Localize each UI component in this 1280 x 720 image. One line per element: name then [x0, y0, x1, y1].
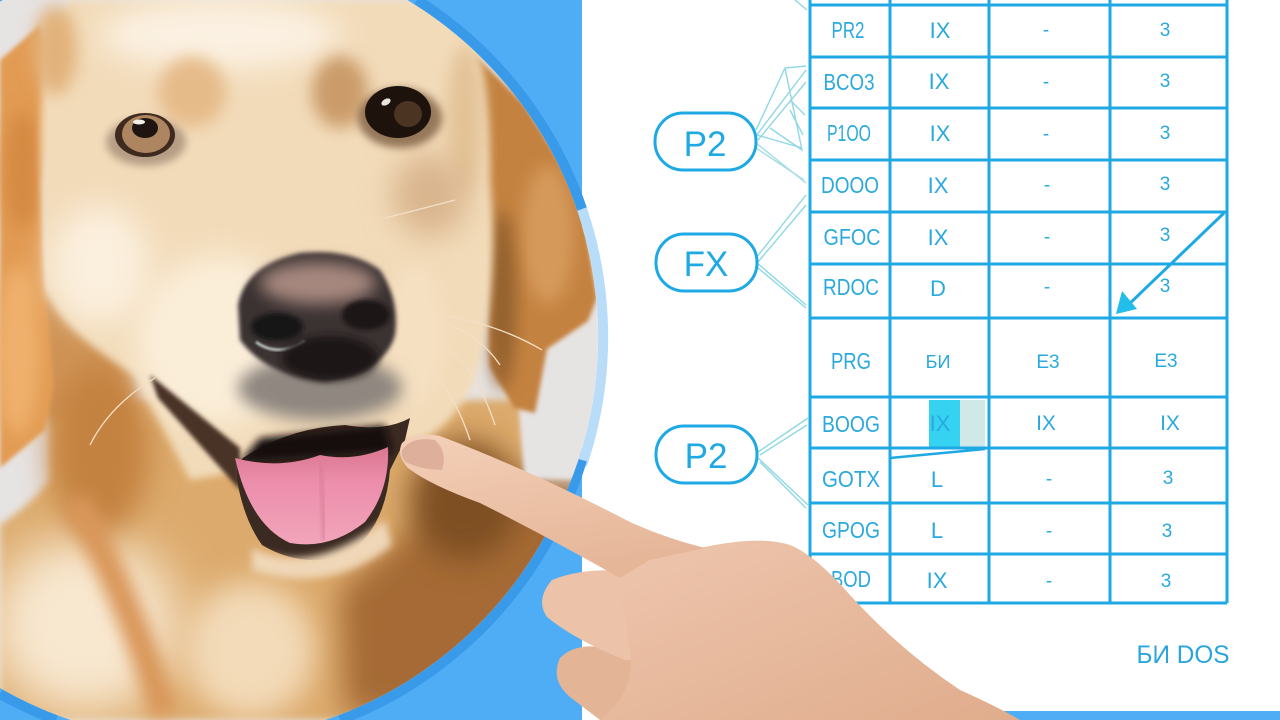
background panel: blue left [0, 0, 582, 720]
left ear dark top [4, 110, 40, 230]
arrow [1116, 213, 1224, 314]
right top tan [447, 45, 483, 195]
pill: P2 lower [656, 426, 757, 483]
column 2 values: IX [927, 568, 948, 593]
nose [238, 252, 396, 382]
fingernail [402, 439, 444, 470]
column 1 labels: GFOC [824, 224, 880, 250]
column 3 values: - [1044, 277, 1050, 298]
panel: white table area [655, 0, 1230, 669]
column 3 values: - [1044, 227, 1050, 248]
column 4 values: 3 [1160, 123, 1170, 144]
column 3 values [1036, 20, 1060, 592]
pill: FX [656, 234, 757, 291]
column 1 labels: P1OO [827, 120, 871, 146]
column 4 values [1154, 20, 1180, 592]
column 2 values: L [931, 467, 943, 492]
dog head [41, 0, 493, 480]
whiskers [90, 200, 542, 445]
right cheek tint [392, 153, 468, 237]
column 4 values: E3 [1154, 351, 1178, 372]
column 3 values: - [1046, 521, 1052, 542]
column 1 labels: RDOC [823, 274, 879, 300]
muzzle [135, 255, 305, 425]
column 1 labels: BOOG [822, 411, 880, 437]
cheek cream left [50, 205, 150, 325]
column 4 values: 3 [1160, 276, 1170, 297]
column 4 values: 3 [1160, 225, 1170, 246]
column 2 values: IX [929, 69, 950, 94]
column 3 values: - [1046, 469, 1052, 490]
column 4 values: 3 [1160, 20, 1170, 41]
darker ring upper right [417, 0, 582, 209]
hand back [600, 541, 1020, 720]
table text [821, 17, 1180, 593]
connectors from pills to table [756, 0, 808, 508]
column 3 values: - [1046, 571, 1052, 592]
column 2 values: БИ [926, 352, 950, 372]
column 3 values: E3 [1036, 352, 1060, 373]
index finger [400, 435, 705, 578]
mouth [150, 375, 410, 560]
lower finger [557, 646, 700, 720]
column 3 values: - [1043, 72, 1049, 93]
background strip: blue bottom right [1000, 711, 1280, 720]
light ring on white panel [582, 209, 603, 465]
right eye [358, 86, 442, 148]
caption: БИ DOS [1136, 641, 1230, 669]
highlighted cell [929, 400, 985, 447]
darker ring lower right [340, 460, 582, 720]
column 4 values: IX [1160, 412, 1180, 435]
column 1 labels: GPOG [822, 517, 880, 543]
middle finger [542, 570, 700, 660]
column 2 values: IX [928, 225, 949, 250]
column 2 values: IX [930, 121, 951, 146]
column 2 values [926, 18, 951, 593]
column 1 labels: BCO3 [824, 69, 874, 95]
column 2 values: L [931, 518, 943, 543]
dog photo circle [0, 0, 620, 720]
column 3 values: IX [1036, 412, 1056, 435]
column 1 labels: GOTX [822, 466, 880, 492]
column 4 values: 3 [1161, 571, 1171, 592]
darker ring lower left [0, 694, 56, 720]
column 3 values: - [1043, 20, 1049, 41]
right ear [470, 50, 597, 413]
left ear highlight [0, 265, 40, 435]
left ear [0, 25, 58, 468]
right ear dark base [488, 210, 516, 390]
muzzle grey [238, 356, 402, 420]
column 1 labels: PRG [831, 348, 871, 374]
head tan upper left [33, 5, 77, 95]
circle backdrop [0, 0, 620, 720]
column 2 values: D [930, 276, 946, 301]
left eye [106, 113, 186, 166]
chin [252, 520, 392, 578]
column 4 values: 3 [1162, 521, 1172, 542]
column 4 values: 3 [1160, 71, 1170, 92]
column 3 values: - [1043, 124, 1049, 145]
column 1 labels: DOOO [821, 172, 879, 198]
column 2 values: IX [928, 173, 949, 198]
table grid [810, 0, 1227, 603]
pill: P2 upper: P2 [684, 125, 726, 164]
brow patch right [312, 56, 368, 128]
chest and neck fur [0, 290, 610, 720]
column 1 labels: BOD [831, 566, 871, 592]
brow patch left [158, 57, 226, 127]
column 2 values: IX [930, 18, 951, 43]
pill: P2 upper [655, 113, 756, 170]
column 1 labels [821, 17, 880, 592]
pill: P2 lower: P2 [685, 437, 727, 476]
column 4 values: 3 [1163, 468, 1173, 489]
column 4 values: 3 [1160, 174, 1170, 195]
column 1 labels: PR2 [832, 17, 864, 43]
pointing hand [400, 435, 1020, 720]
right muzzle [397, 278, 433, 392]
column 3 values: - [1044, 175, 1050, 196]
column 2 values: IX [930, 411, 951, 436]
forehead highlight [100, 0, 340, 70]
right ear light patch [522, 165, 574, 305]
pill: FX: FX [684, 245, 728, 284]
